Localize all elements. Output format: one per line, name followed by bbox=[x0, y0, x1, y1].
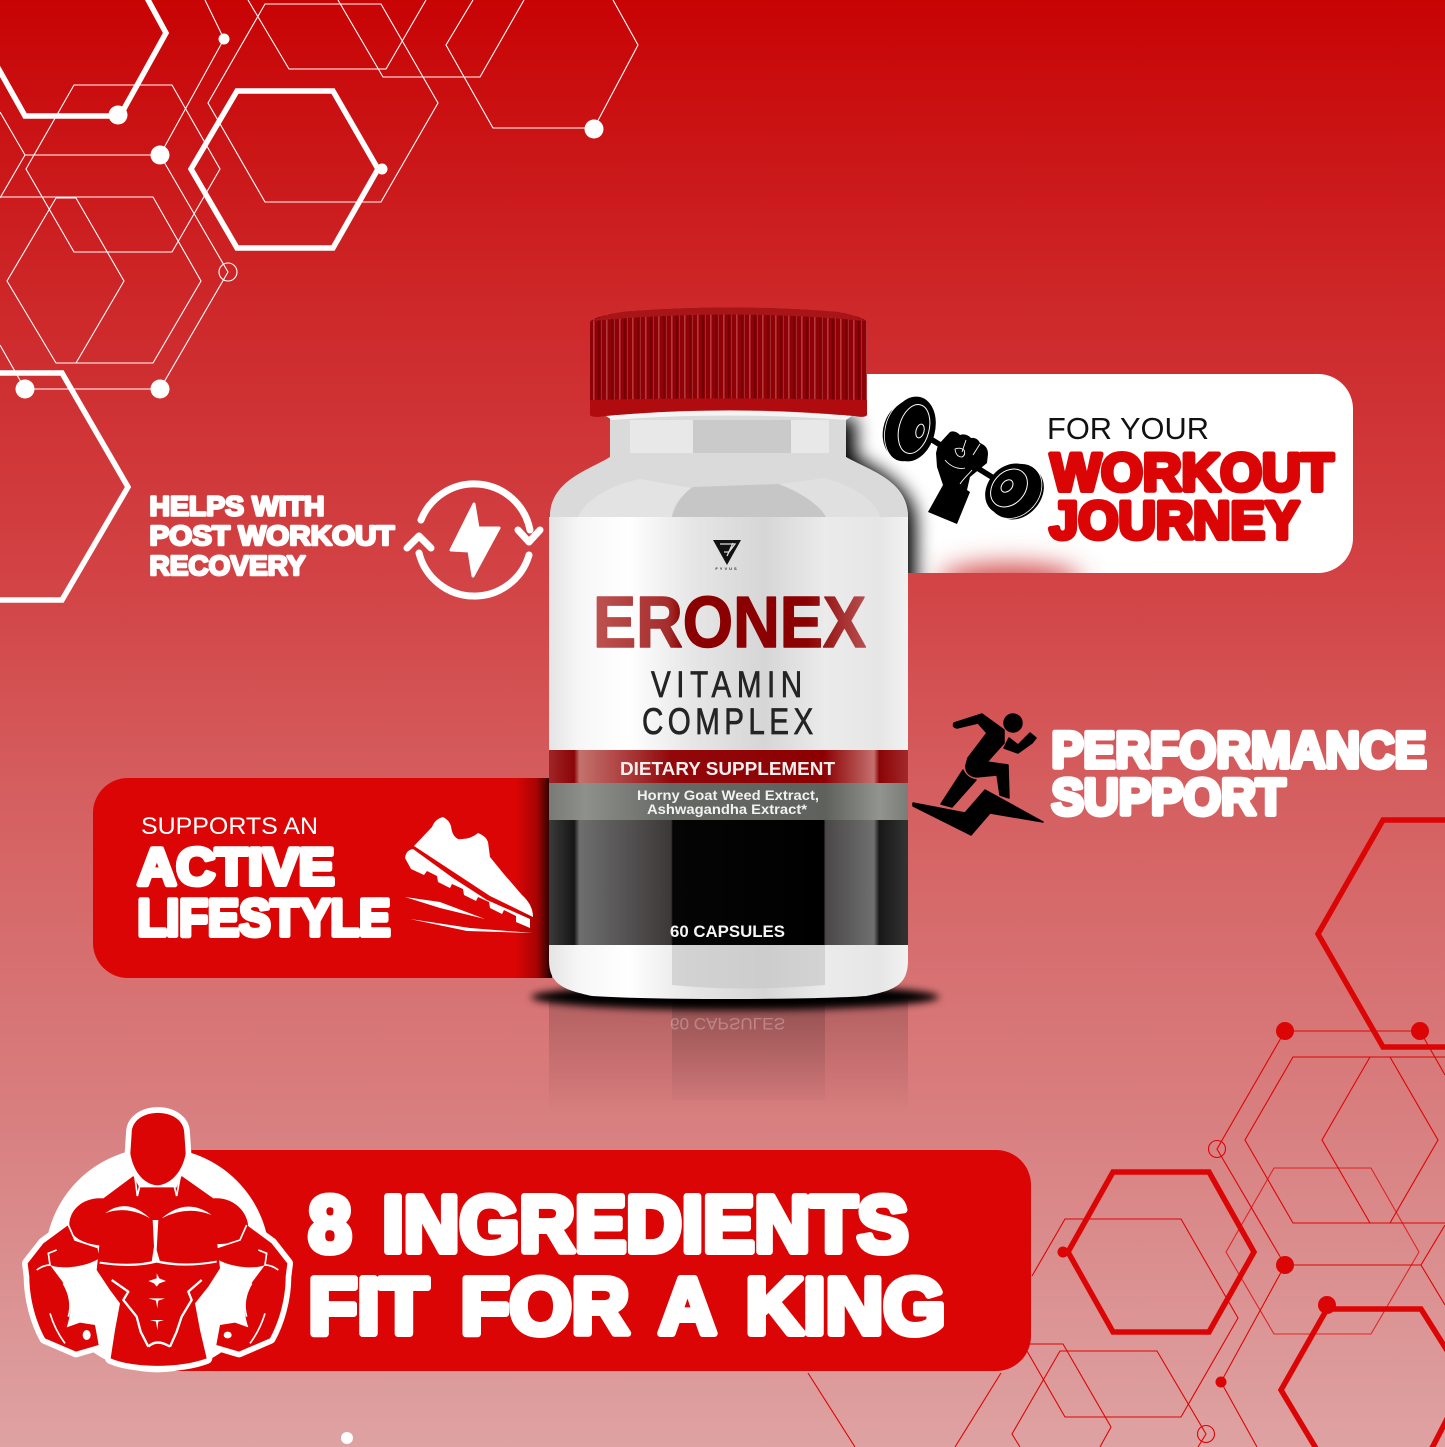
bottle base shading bbox=[672, 945, 825, 988]
brand logo bbox=[713, 540, 741, 571]
text: helps with: HELPS WITH bbox=[150, 491, 324, 522]
text: fit for a king: FIT FOR A KING bbox=[308, 1262, 946, 1350]
text: for your: FOR YOUR bbox=[1047, 411, 1209, 446]
callout: performance support bbox=[913, 714, 1426, 835]
text: ingredient line one: Horny Goat Weed Extract, bbox=[637, 787, 819, 803]
text: recovery: RECOVERY bbox=[150, 550, 306, 581]
bottle cap bbox=[590, 308, 867, 420]
decorative red hexagon network bottom-right bbox=[808, 820, 1445, 1447]
text: support: SUPPORT bbox=[1052, 768, 1286, 826]
callout: helps with post workout recovery bbox=[150, 484, 540, 596]
text: 60 capsules: 60 CAPSULES bbox=[670, 923, 785, 941]
text: lifestyle: LIFESTYLE bbox=[138, 890, 390, 948]
text: post workout: POST WORKOUT bbox=[150, 520, 394, 551]
icon: sprinting figure bbox=[913, 714, 1043, 835]
bottle reflection bbox=[549, 1000, 908, 1115]
bottle body bbox=[549, 415, 908, 999]
callout: for your workout journey bbox=[840, 374, 1353, 573]
bottle ground shadow bbox=[531, 984, 939, 1010]
text: supports an: SUPPORTS AN bbox=[141, 813, 318, 840]
icon: running shoe bbox=[405, 817, 533, 933]
small white dot at bottom bbox=[341, 1432, 353, 1444]
text: vitamin: VITAMIN bbox=[651, 665, 802, 706]
text: journey: JOURNEY bbox=[1050, 492, 1300, 550]
icon: recharge arrows with bolt bbox=[407, 484, 540, 596]
band: dietary supplement bbox=[549, 750, 908, 783]
label background bbox=[549, 517, 908, 750]
banner: 8 ingredients fit for a king bbox=[28, 1113, 1031, 1372]
icon: fist holding dumbbell bbox=[879, 391, 1054, 530]
text: complex: COMPLEX bbox=[642, 702, 813, 743]
text: ingredient line two: Ashwagandha Extract* bbox=[647, 801, 808, 817]
text: fyvus: FYVUS bbox=[715, 566, 739, 571]
text: active: ACTIVE bbox=[138, 838, 334, 896]
text: 8 ingredients: 8 INGREDIENTS bbox=[308, 1180, 908, 1268]
icon: muscular bodybuilder badge bbox=[28, 1113, 287, 1372]
product bottle bbox=[549, 308, 908, 999]
text: eronex brand name: ERONEX bbox=[593, 583, 866, 663]
callout: supports an active lifestyle bbox=[93, 778, 552, 978]
text: dietary supplement: DIETARY SUPPLEMENT bbox=[620, 758, 836, 779]
band: black lower label bbox=[549, 820, 908, 945]
text: performance: PERFORMANCE bbox=[1052, 722, 1426, 778]
decorative white hexagon network top-left bbox=[0, 0, 638, 600]
text: mirrored 60 capsules: 60 CAPSULES bbox=[670, 1014, 785, 1032]
band: ingredients bbox=[549, 783, 908, 820]
shoulder shading bbox=[550, 416, 908, 517]
text: workout: WORKOUT bbox=[1050, 444, 1334, 502]
